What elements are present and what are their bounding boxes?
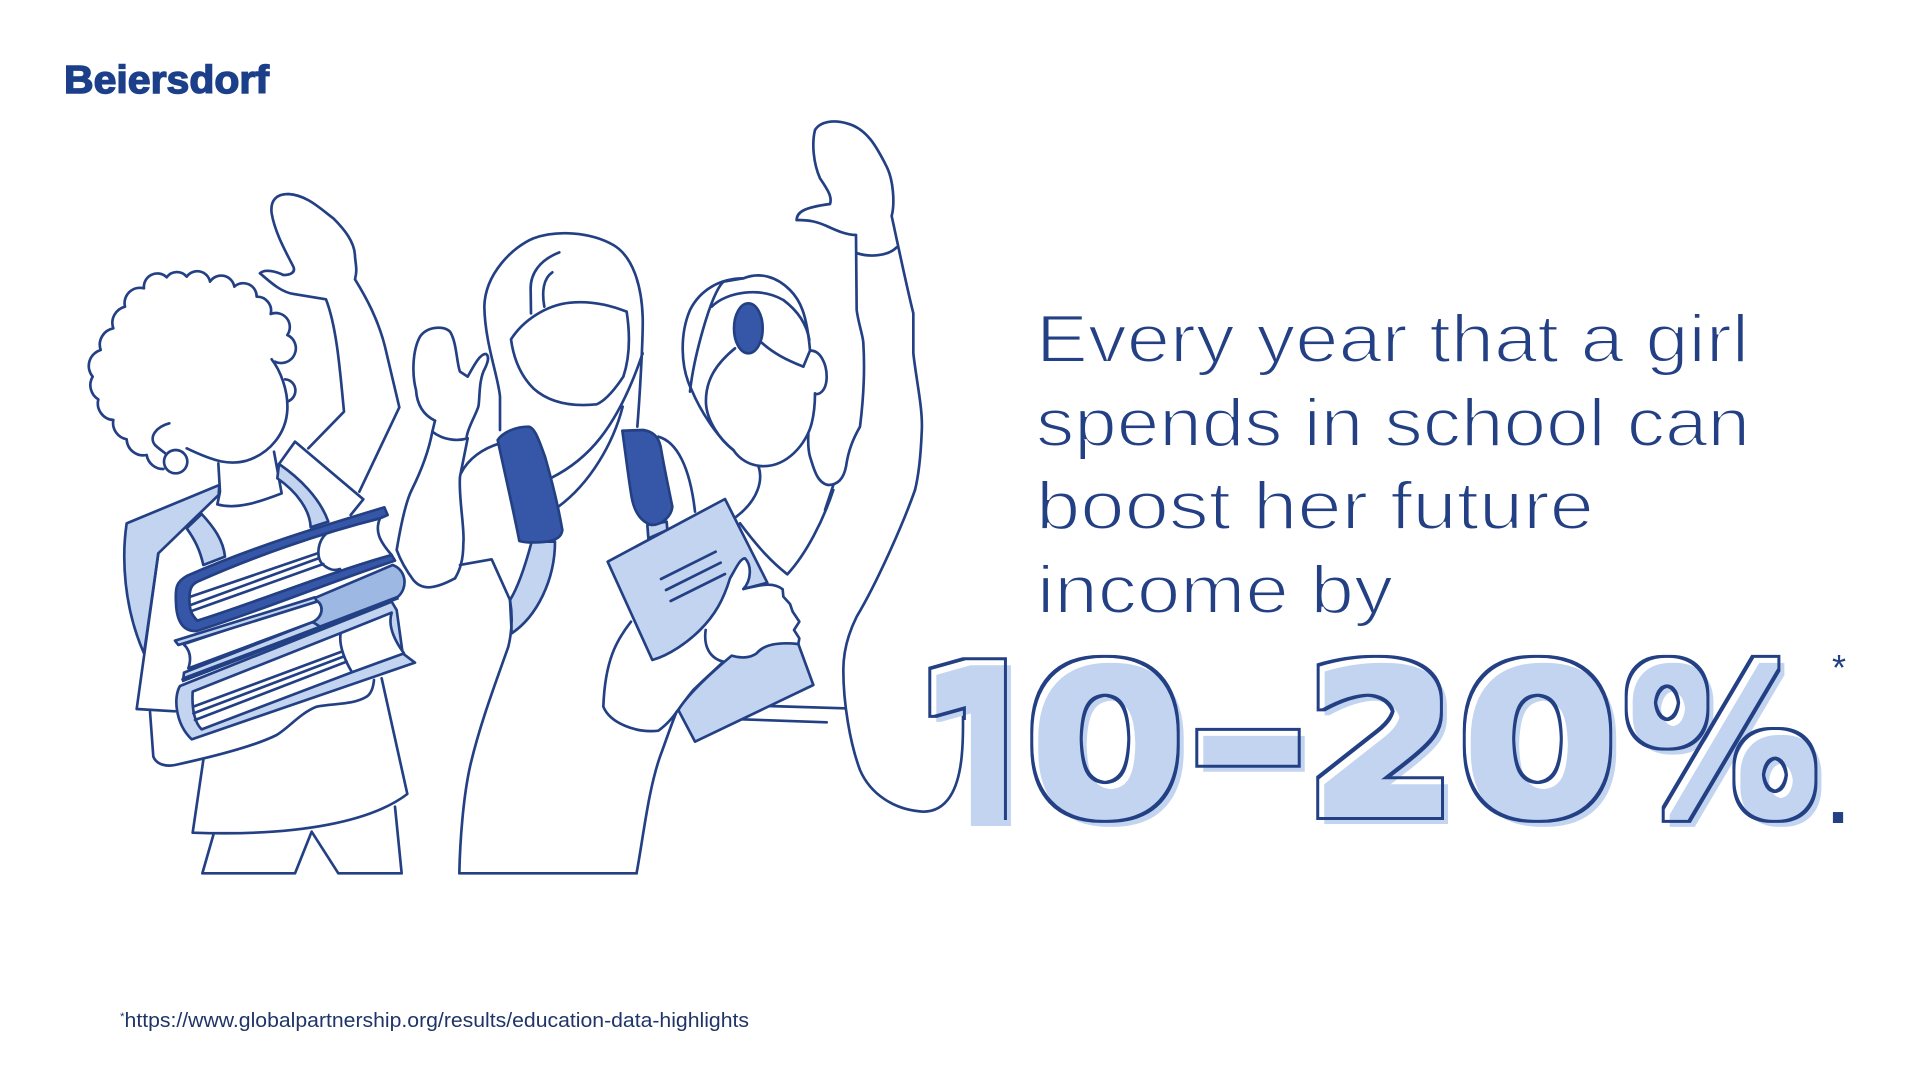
statement text: spends in school can — [1036, 385, 1750, 461]
footnote source: * — [120, 1011, 125, 1023]
figure: left girl head and raised arm — [89, 194, 399, 527]
statement text: Every year that a girl — [1036, 301, 1749, 377]
big number fill layer: 0 — [1029, 632, 1193, 866]
asterisk: * — [1832, 647, 1846, 688]
illustration: girls with books — [89, 121, 963, 873]
big number outline: 10–20%: 1 — [909, 610, 1051, 930]
big number outline: 10–20%: 0 — [1455, 626, 1620, 860]
big number fill layer: 2 — [1308, 632, 1466, 866]
big number fill layer: – — [1192, 630, 1316, 850]
big number outline: 10–20% — [928, 654, 1818, 823]
big number outline: 10–20%: – — [1186, 624, 1310, 844]
big number fill layer: 1 — [915, 616, 1057, 936]
hand — [705, 585, 799, 662]
figure: right girl body, paper and hand — [603, 490, 963, 873]
big number outline: 10–20%: 2 — [1302, 626, 1460, 860]
statement text: income by — [1037, 552, 1393, 628]
book: bottom — [176, 602, 415, 739]
big number fill layer: 0 — [1461, 632, 1626, 866]
big number outline: 10–20%: 0 — [1023, 626, 1187, 860]
backpack pad left — [498, 427, 562, 543]
folder — [678, 643, 813, 742]
book: middle — [175, 565, 405, 681]
logo: Beiersdorf: Beiersdorf — [64, 59, 270, 102]
backpack pad right — [622, 430, 672, 525]
paper — [608, 499, 767, 660]
period after number: . — [1827, 769, 1849, 837]
figure: middle girl — [397, 233, 695, 873]
footnote source: https://www.globalpartnership.org/results/education-data-highlights — [125, 1010, 749, 1032]
big number fill layer — [936, 662, 1822, 827]
big number outline: 10–20%: % — [1622, 625, 1820, 859]
figure: right girl head and raised arm — [683, 121, 922, 517]
big number fill layer: % — [1628, 631, 1826, 865]
figure: left girl lower body and backpack — [124, 485, 407, 873]
statement text: boost her future — [1036, 468, 1594, 544]
statement text — [1036, 301, 1750, 628]
icon: stack of books — [175, 507, 415, 739]
book: top — [176, 507, 395, 631]
